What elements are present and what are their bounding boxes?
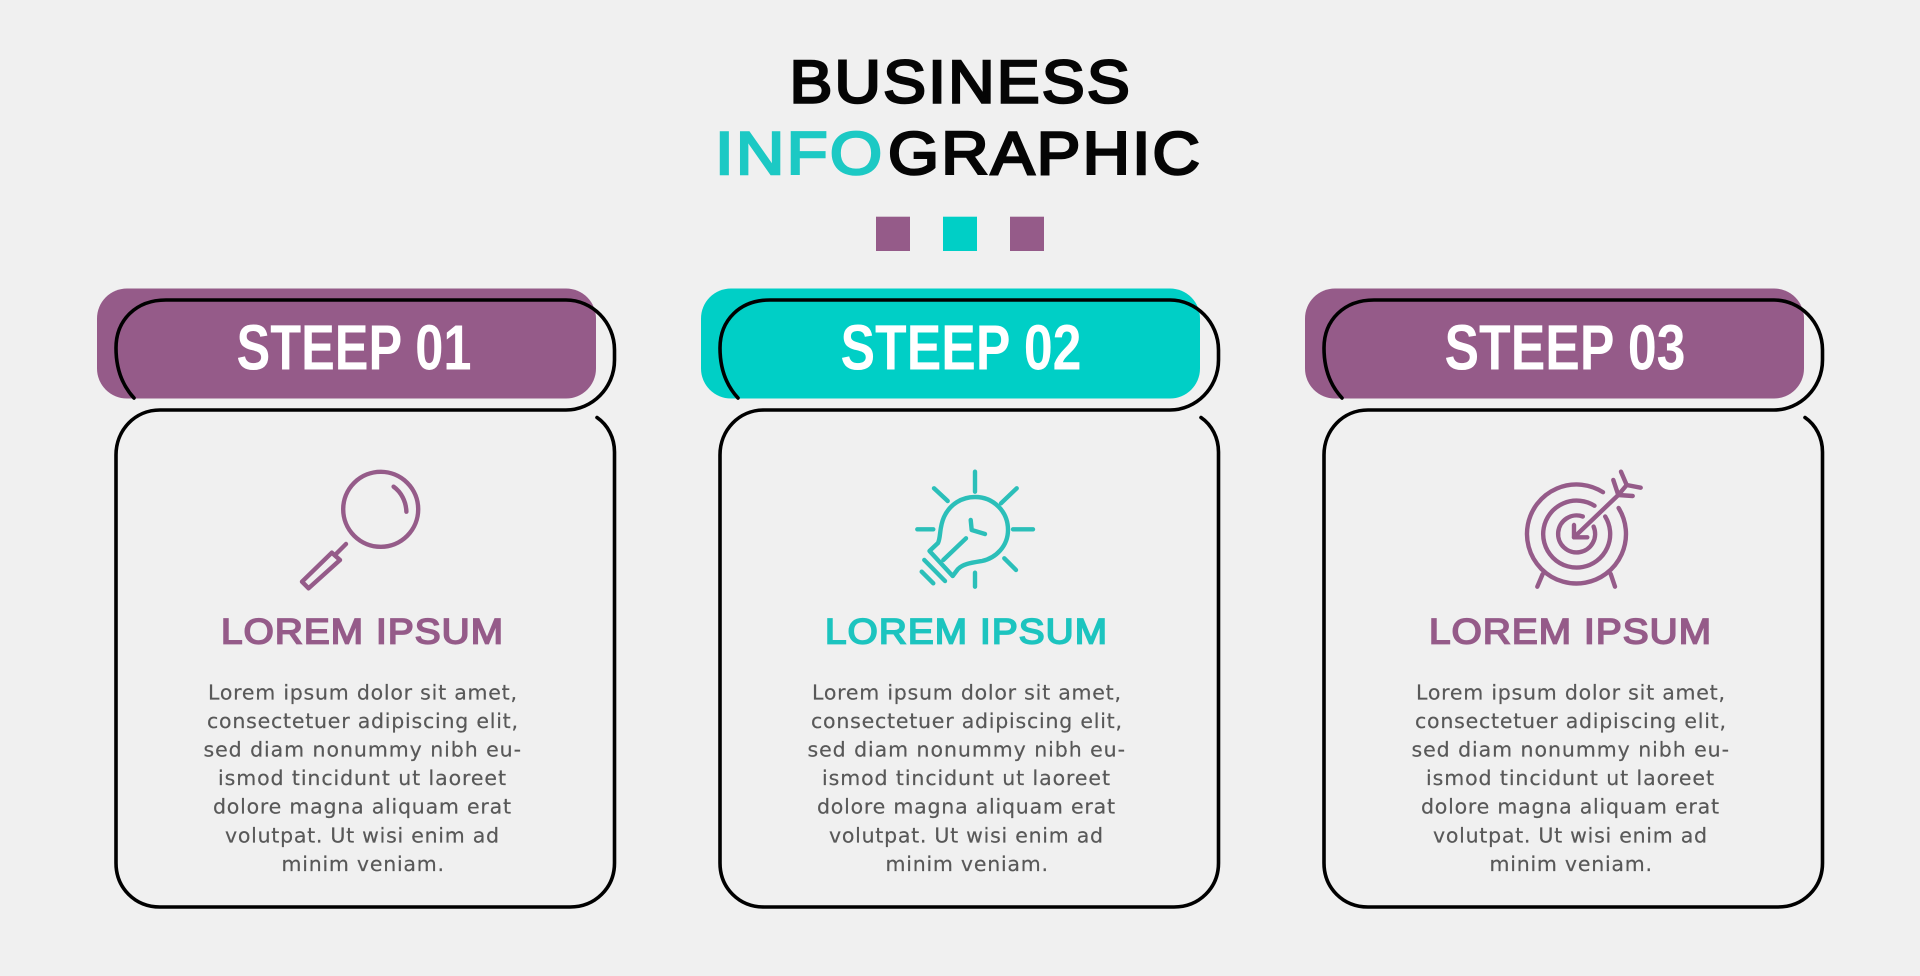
step 1 outline (116, 300, 614, 907)
step 2 body text: ismod tincidunt ut laoreet (822, 766, 1110, 790)
step 2 body text: consectetuer adipiscing elit, (811, 709, 1122, 733)
title (715, 49, 1202, 187)
panel: step 3 (1305, 288, 1822, 907)
panel: step 2 (701, 288, 1218, 907)
step 3 outline (1324, 300, 1822, 907)
step 3 body text: sed diam nonummy nibh eu- (1412, 738, 1729, 762)
icon: target with arrow (1527, 472, 1641, 587)
step 2 body text: minim veniam. (886, 852, 1048, 876)
step 1 heading: STEEP 01 (236, 312, 472, 384)
step 3 body text: minim veniam. (1490, 852, 1652, 876)
step 2 body text: sed diam nonummy nibh eu- (808, 738, 1125, 762)
step 2 body text: Lorem ipsum dolor sit amet, (812, 680, 1121, 704)
title: BUSINESS (790, 49, 1132, 116)
step 3 body text (1412, 680, 1729, 876)
step 3 subheading: LOREM IPSUM (1429, 611, 1712, 651)
step 2 header bar (701, 288, 1200, 398)
step 2 body text: dolore magna aliquam erat (817, 795, 1115, 819)
step 2 body text: volutpat. Ut wisi enim ad (829, 823, 1103, 847)
step 3 body text: Lorem ipsum dolor sit amet, (1416, 680, 1725, 704)
step 3 body text: ismod tincidunt ut laoreet (1426, 766, 1714, 790)
step 1 body text (204, 680, 521, 876)
title: GRAPHIC (888, 121, 1202, 187)
step 3 header bar (1305, 288, 1804, 398)
step 1 body text: sed diam nonummy nibh eu- (204, 738, 521, 762)
step 2 heading: STEEP 02 (840, 312, 1082, 384)
step 1 header bar (97, 288, 596, 398)
step 1 body text: dolore magna aliquam erat (213, 795, 511, 819)
step 3 body text: volutpat. Ut wisi enim ad (1433, 823, 1707, 847)
icon: light bulb with clock (917, 472, 1033, 587)
step 2 body text (808, 680, 1125, 876)
step 1 subheading: LOREM IPSUM (221, 611, 504, 651)
step 1 body text: minim veniam. (282, 852, 444, 876)
decorative squares (876, 217, 1044, 251)
title: INFO (715, 120, 884, 187)
step 1 body text: Lorem ipsum dolor sit amet, (208, 680, 517, 704)
step 3 body text: dolore magna aliquam erat (1421, 795, 1719, 819)
step 3 heading: STEEP 03 (1444, 312, 1686, 384)
step 1 body text: volutpat. Ut wisi enim ad (225, 823, 499, 847)
step 1 body text: ismod tincidunt ut laoreet (218, 766, 506, 790)
step 2 subheading: LOREM IPSUM (825, 611, 1108, 651)
icon: magnifying glass (302, 472, 418, 588)
step 2 outline (720, 300, 1218, 907)
panel: step 1 (97, 288, 614, 907)
step 1 body text: consectetuer adipiscing elit, (207, 709, 518, 733)
step 3 body text: consectetuer adipiscing elit, (1415, 709, 1726, 733)
